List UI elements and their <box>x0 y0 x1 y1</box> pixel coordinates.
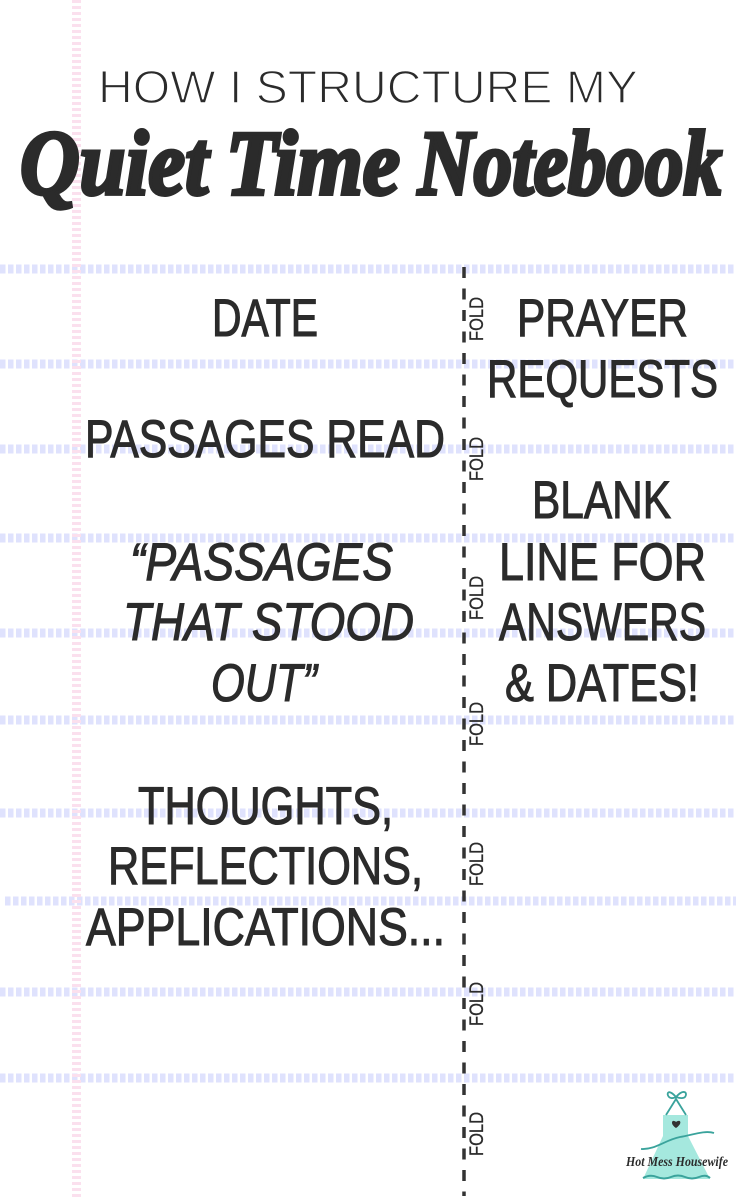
left column labels: REFLECTIONS, <box>108 837 423 896</box>
left column labels <box>85 289 445 957</box>
left column labels: “PASSAGES <box>130 533 393 592</box>
left column labels: PASSAGES READ <box>85 410 445 469</box>
fold labels <box>467 297 488 1156</box>
fold labels: FOLD <box>467 702 488 746</box>
fold labels: FOLD <box>467 842 488 886</box>
fold labels: FOLD <box>467 982 488 1026</box>
right column labels: PRAYER <box>517 289 688 348</box>
left column labels: THOUGHTS, <box>138 777 393 836</box>
subtitle: HOW I STRUCTURE MY <box>98 61 638 113</box>
left column labels: THAT STOOD <box>123 593 414 652</box>
logo: apron <box>625 1092 728 1179</box>
left column labels: APPLICATIONS... <box>86 898 445 957</box>
title: Quiet <box>20 112 210 214</box>
right column labels <box>487 289 718 713</box>
title: Time <box>226 112 400 214</box>
left column labels: OUT” <box>211 654 319 713</box>
fold labels: FOLD <box>467 437 488 481</box>
right column labels: & DATES! <box>505 654 699 713</box>
fold labels: FOLD <box>467 297 488 341</box>
fold line <box>462 267 466 1196</box>
left column labels: DATE <box>212 289 318 348</box>
fold labels: FOLD <box>467 1112 488 1156</box>
fold labels: FOLD <box>467 576 488 620</box>
title <box>20 112 722 214</box>
right column labels: BLANK <box>532 471 671 530</box>
